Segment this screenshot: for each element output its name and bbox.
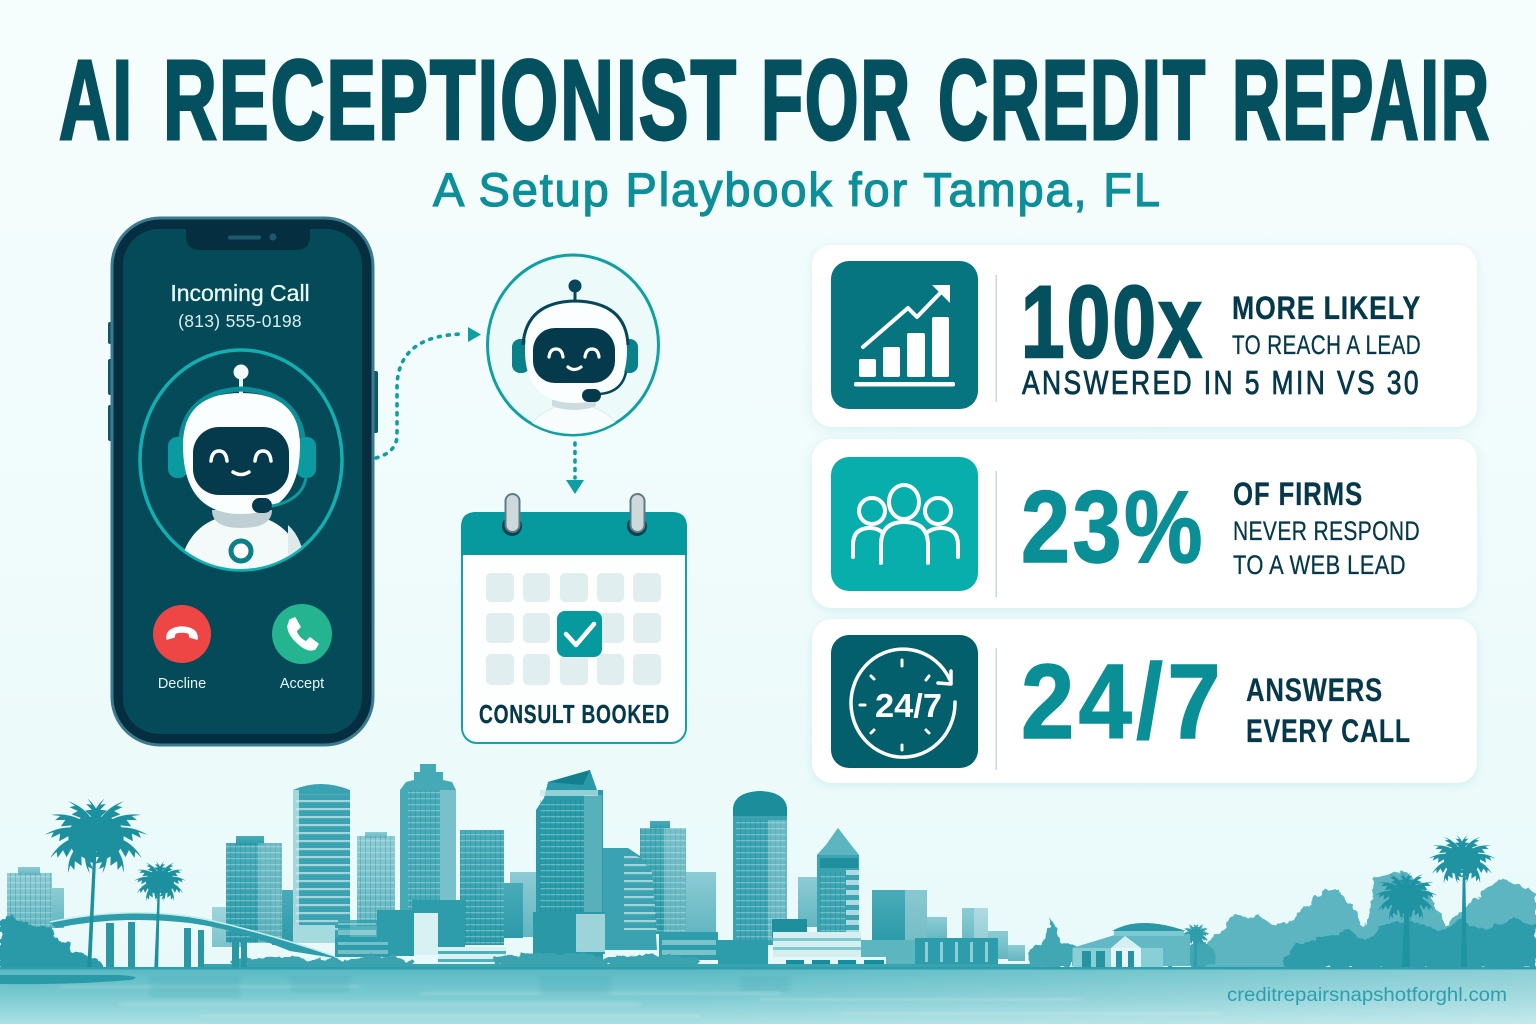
- subtitle: A Setup Playbook for Tampa, FL: [433, 163, 1160, 216]
- palm trees left: [44, 797, 186, 975]
- title: [59, 37, 1491, 163]
- robot avatar large: [168, 364, 316, 575]
- pointed tower: [817, 828, 859, 935]
- small palms behind pavilion: [1159, 923, 1210, 968]
- label: more likely: MORE LIKELY: [1232, 290, 1421, 326]
- low pavilion: [773, 932, 886, 967]
- title: FOR: [761, 37, 912, 163]
- label: answers: ANSWERS: [1246, 672, 1383, 708]
- phone notch: [186, 228, 310, 250]
- label: every call: EVERY CALL: [1246, 713, 1411, 749]
- stat: 100x: 100x: [1021, 265, 1204, 379]
- panel: water: [0, 967, 1536, 1024]
- decline label: Decline: [158, 676, 206, 692]
- panel: stat card 100x: [812, 245, 1477, 427]
- label: to a web lead: TO A WEB LEAD: [1233, 550, 1406, 580]
- phone side buttons: [108, 322, 378, 441]
- accept button: [272, 604, 332, 664]
- decline button: [153, 605, 211, 663]
- icon: people: [831, 457, 978, 591]
- icon: calendar consult booked: [461, 494, 687, 743]
- label: answered in 5 min: ANSWERED IN 5 MIN VS 30: [1022, 364, 1421, 401]
- arrow: phone to robot: [376, 327, 481, 458]
- angled top tower: [536, 770, 603, 960]
- icon: growth chart: [831, 261, 978, 409]
- label: to reach a lead: TO REACH A LEAD: [1232, 330, 1421, 360]
- title: CREDIT: [938, 37, 1207, 163]
- check mark tile: [557, 611, 602, 657]
- incoming call label: Incoming Call: [170, 280, 310, 306]
- stat: 24/7: 24/7: [1021, 643, 1225, 761]
- calendar caption: CONSULT BOOKED: [479, 699, 670, 729]
- accept label: Accept: [280, 676, 324, 692]
- icon: robot in circle: [486, 254, 660, 436]
- phone number: (813) 555-0198: [178, 311, 302, 331]
- palm trees right: [1374, 834, 1496, 968]
- band of shrubs: [230, 953, 700, 969]
- label: of firms: OF FIRMS: [1233, 476, 1363, 512]
- striped tower: [293, 784, 350, 937]
- far buildings: [7, 832, 1025, 961]
- stepped tower: [400, 764, 456, 930]
- left bushes: [0, 917, 110, 973]
- panel: tampa skyline: [0, 764, 1536, 976]
- mid towers: [226, 821, 927, 945]
- round tower: [733, 791, 787, 945]
- low buildings: [335, 900, 998, 965]
- icon: smartphone incoming call: [108, 218, 378, 745]
- label: never respond: NEVER RESPOND: [1233, 516, 1420, 546]
- stepped office: [603, 848, 657, 950]
- tree mass right: [1026, 870, 1536, 969]
- title: RECEPTIONIST: [163, 37, 738, 163]
- clock label: 24/7: [875, 687, 942, 724]
- building: domed pavilion: [1072, 923, 1190, 968]
- stat: 23%: 23%: [1021, 470, 1205, 584]
- website url: creditrepairsnapshotforghl.com: [1227, 984, 1507, 1006]
- bridge: [50, 913, 334, 976]
- phone screen: [123, 229, 362, 734]
- title: AI: [59, 37, 134, 163]
- icon: 24/7 clock: [831, 635, 978, 768]
- panel: stat card 24/7: [812, 619, 1477, 783]
- phone body: [112, 218, 373, 745]
- arrow: robot to calendar: [566, 443, 584, 494]
- avatar ring: [140, 350, 342, 570]
- panel: stat card 23%: [812, 439, 1477, 608]
